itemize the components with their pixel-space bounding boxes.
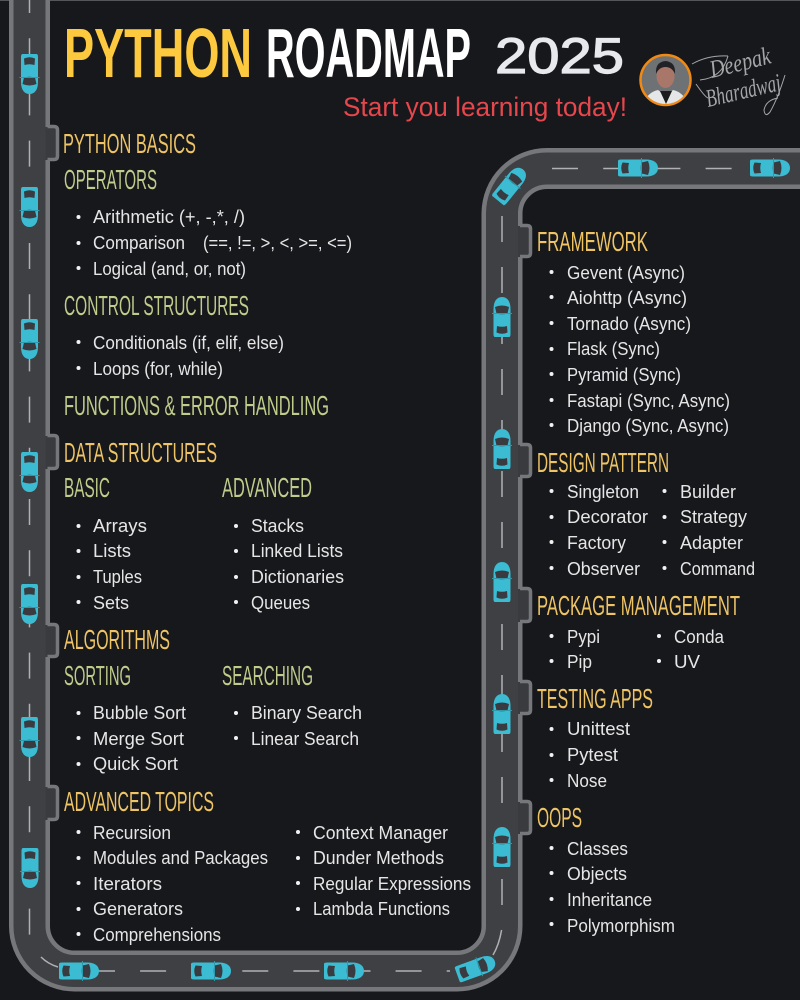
section: data structures: BASIC [64, 472, 110, 503]
section: testing apps [537, 683, 653, 791]
section: framework: Fastapi (Sync, Async) [567, 391, 730, 411]
section: framework: Flask (Sync) [567, 339, 660, 359]
section: framework [537, 226, 730, 436]
title [64, 14, 624, 92]
title: ROADMAP [266, 14, 471, 92]
section: advanced topics [64, 786, 471, 945]
section: design pattern: Builder [680, 482, 736, 502]
section: advanced topics: Iterators [93, 874, 162, 894]
section: advanced topics: Dunder Methods [313, 848, 444, 868]
section: python basics: (==, !=, >, <, >=, <=) [203, 233, 352, 253]
section: python basics: Loops (for, while) [93, 359, 223, 379]
section: advanced topics: Generators [93, 899, 183, 919]
section: algorithms: ALGORITHMS [64, 624, 170, 655]
section: advanced topics: Context Manager [313, 823, 448, 843]
section: algorithms [64, 624, 362, 774]
road notches [46, 126, 530, 834]
section: design pattern: Factory [567, 533, 626, 553]
section: testing apps: Pytest [567, 745, 618, 765]
section: data structures: Queues [251, 593, 310, 613]
section: framework: Pyramid (Sync) [567, 365, 681, 385]
section: package management: Conda [674, 627, 725, 647]
section: data structures: Stacks [251, 516, 304, 536]
section: algorithms: Bubble Sort [93, 703, 186, 723]
section: design pattern: Decorator [567, 507, 648, 527]
section: advanced topics: Modules and Packages [93, 848, 268, 868]
section: python basics: PYTHON BASICS [63, 128, 196, 159]
section: package management: Pip [567, 652, 592, 672]
title: PYTHON [64, 14, 252, 92]
section: data structures: Tuples [93, 567, 142, 587]
section: framework: Django (Sync, Async) [567, 416, 729, 436]
section: data structures [64, 437, 344, 613]
section: package management: UV [674, 652, 700, 672]
section: python basics: Comparison [93, 233, 185, 253]
section: oops: Classes [567, 839, 628, 859]
section: oops: Objects [567, 864, 627, 884]
section: design pattern: Strategy [680, 507, 747, 527]
section: data structures: Arrays [93, 516, 147, 536]
section: oops: Polymorphism [567, 916, 675, 936]
section: data structures: Dictionaries [251, 567, 344, 587]
section: design pattern: Command [680, 559, 755, 579]
section: algorithms: Binary Search [251, 703, 362, 723]
section: framework: Gevent (Async) [567, 263, 685, 283]
author portrait [640, 55, 690, 108]
section: python basics [63, 128, 352, 421]
section: python basics: Logical (and, or, not) [93, 259, 246, 279]
section: python basics: CONTROL STRUCTURES [64, 290, 249, 321]
section: data structures: DATA STRUCTURES [64, 437, 217, 468]
section: data structures: Lists [93, 541, 131, 561]
section: advanced topics: Regular Expressions [313, 874, 471, 894]
section: algorithms: Merge Sort [93, 729, 184, 749]
section: design pattern: DESIGN PATTERN [537, 447, 669, 478]
section: framework: FRAMEWORK [537, 226, 648, 257]
subtitle: Start you learning today! [343, 92, 627, 122]
section: oops [537, 802, 675, 936]
section: algorithms: SORTING [64, 660, 131, 691]
section: design pattern: Adapter [680, 533, 743, 553]
section: algorithms: Linear Search [251, 729, 359, 749]
section: oops: OOPS [537, 802, 582, 833]
section: testing apps: Nose [567, 771, 607, 791]
section: data structures: Sets [93, 593, 129, 613]
section: advanced topics: Comprehensions [93, 925, 221, 945]
section: package management [537, 590, 740, 672]
section: testing apps: Unittest [567, 719, 630, 739]
title: 2025 [495, 28, 624, 84]
section: framework: Aiohttp (Async) [567, 288, 687, 308]
section: python basics: Conditionals (if, elif, else) [93, 333, 284, 353]
section: design pattern: Singleton [567, 482, 639, 502]
section: algorithms: SEARCHING [222, 660, 313, 691]
section: testing apps: TESTING APPS [537, 683, 653, 714]
section: python basics: FUNCTIONS & ERROR HANDLING [64, 390, 329, 421]
section: package management: Pypi [567, 627, 600, 647]
section: data structures: Linked Lists [251, 541, 343, 561]
author signature [692, 42, 785, 115]
section: advanced topics: Recursion [93, 823, 171, 843]
section: design pattern: Observer [567, 559, 640, 579]
section: framework: Tornado (Async) [567, 314, 691, 334]
section: algorithms: Quick Sort [93, 754, 178, 774]
section: python basics: Arithmetic (+, -,*, /) [93, 207, 245, 227]
section: design pattern [537, 447, 755, 579]
section: oops: Inheritance [567, 890, 652, 910]
section: advanced topics: ADVANCED TOPICS [64, 786, 214, 817]
section: python basics: OPERATORS [64, 164, 157, 195]
author signature: Deepak [706, 42, 774, 84]
section: advanced topics: Lambda Functions [313, 899, 450, 919]
section: data structures: ADVANCED [222, 472, 312, 503]
